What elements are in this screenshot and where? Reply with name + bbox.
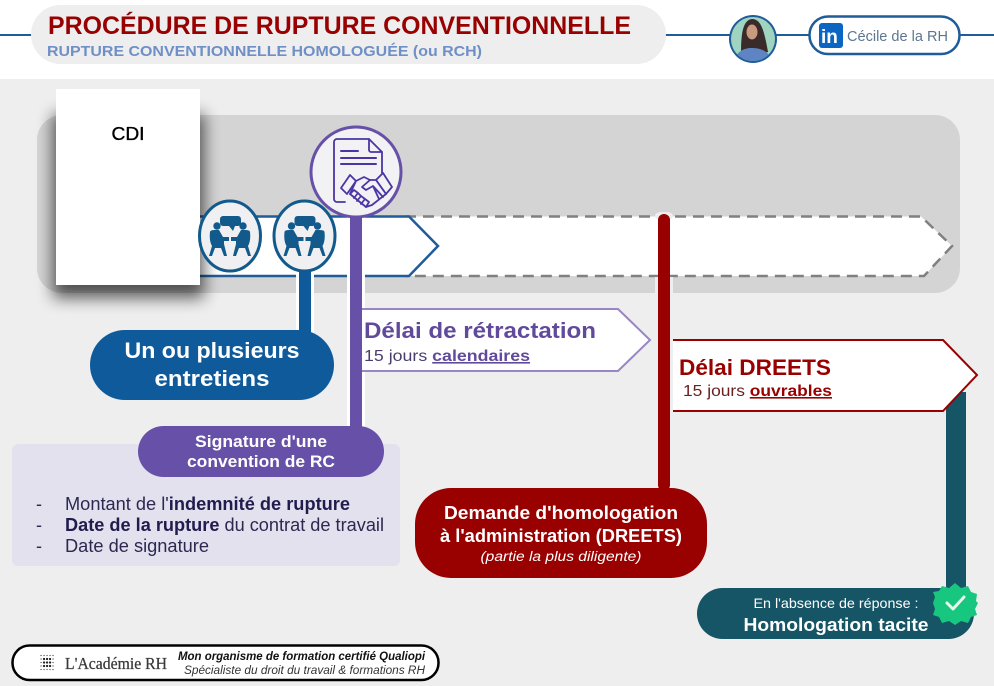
footer line 1: Mon organisme de formation certifié Qualiopi (178, 651, 426, 663)
panel: timeline band (37, 115, 960, 293)
callout: entretiens: entretiens (154, 366, 270, 391)
connector: demande DREETS (655, 212, 673, 491)
linkedin badge (810, 16, 960, 54)
footer line 2: Spécialiste du droit du travail & formations RH (184, 665, 426, 677)
arrow: délai de rétractation (362, 309, 650, 371)
icon: academy logo (41, 656, 55, 670)
callout: demande d'homologation: Demande d'homologation (444, 503, 678, 523)
icon detail: document (334, 139, 382, 202)
arrow: délai DREETS: Délai DREETS (679, 355, 831, 380)
connector: entretiens (296, 265, 314, 335)
callout: entretiens: Un ou plusieurs (124, 338, 300, 363)
callout: demande d'homologation: à l'administration (DREETS) (440, 526, 682, 546)
CDI label: CDI (112, 124, 144, 144)
arrow: blue timeline (190, 216, 438, 276)
callout: demande d'homologation: (partie la plus diligente) (480, 549, 642, 564)
title block (31, 5, 666, 64)
arrow: délai DREETS: 15 jours ouvrables (683, 383, 832, 400)
icon: green check badge (933, 583, 978, 625)
header line (0, 34, 994, 36)
callout: signature (138, 426, 384, 477)
callout: homologation tacite: En l'absence de réponse : (754, 595, 918, 611)
list item: montant: - (36, 494, 42, 514)
callout: signature: convention de RC (187, 453, 335, 471)
panel: convention content (12, 444, 400, 566)
list item: date de signature: - (36, 536, 42, 556)
arrow: délai de rétractation: 15 jours calendaires (364, 348, 530, 365)
list item: date de rupture: - (36, 515, 42, 535)
title: PROCÉDURE DE RUPTURE CONVENTIONNELLE (48, 11, 631, 40)
connector: signature (347, 210, 365, 430)
icon: second interview (274, 201, 335, 271)
callout: homologation tacite: Homologation tacite (744, 615, 928, 635)
icon: linkedin: in (821, 27, 838, 48)
callout: signature: Signature d'une (195, 433, 327, 451)
callout: homologation tacite (697, 588, 974, 639)
callout: entretiens (90, 330, 334, 400)
list item: date de rupture: Date de la rupture du contrat de travail (65, 515, 383, 535)
academy name: L'Académie RH (65, 654, 167, 673)
connector: homologation (946, 392, 966, 592)
icon: signed agreement (311, 127, 401, 217)
arrow: dashed remaining timeline (405, 216, 952, 276)
footer: training organisation (12, 646, 438, 680)
panel: CDI card (53, 89, 204, 298)
linkedin name: Cécile de la RH (847, 28, 948, 45)
arrow: délai DREETS (673, 340, 977, 411)
icon detail: handshake (341, 173, 392, 194)
icon: first interview (200, 201, 260, 271)
arrow: délai de rétractation: Délai de rétractation (364, 318, 596, 343)
subtitle: RUPTURE CONVENTIONNELLE HOMOLOGUÉE (ou RCH) (47, 43, 482, 60)
callout: demande d'homologation (415, 488, 707, 578)
list item: montant: Montant de l'indemnité de rupture (65, 494, 348, 514)
icon: linkedin (819, 23, 843, 48)
list item: date de signature: Date de signature (65, 536, 209, 556)
avatar portrait (729, 15, 777, 63)
